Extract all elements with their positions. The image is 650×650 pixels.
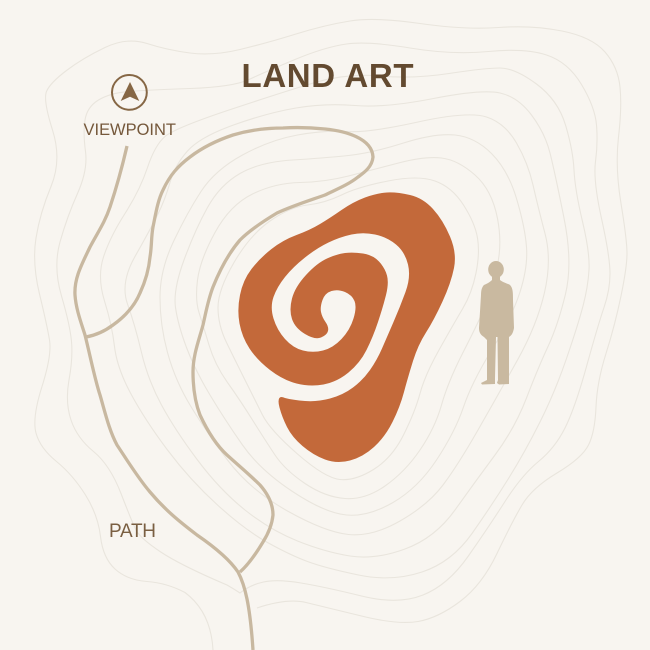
icon: viewpoint compass bbox=[112, 75, 147, 110]
body bbox=[479, 276, 514, 384]
person silhouette for scale bbox=[479, 261, 514, 384]
label: path: PATH bbox=[109, 521, 156, 542]
title: LAND ART bbox=[242, 57, 414, 94]
land art spiral earthwork bbox=[238, 192, 455, 462]
branch path looping around the artwork bbox=[86, 128, 373, 572]
head bbox=[488, 261, 504, 278]
main path from viewpoint to bottom bbox=[75, 146, 253, 650]
label: viewpoint: VIEWPOINT bbox=[84, 121, 176, 139]
walking paths bbox=[75, 128, 373, 650]
